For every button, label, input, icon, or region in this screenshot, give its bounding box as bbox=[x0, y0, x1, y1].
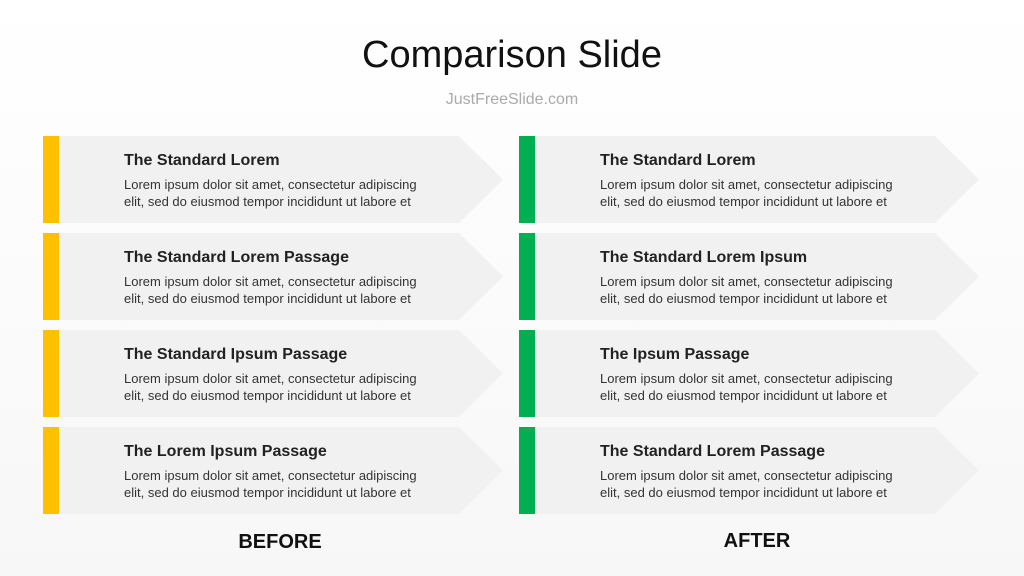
after item 4 bbox=[519, 427, 937, 514]
after item 2: elit, sed do eiusmod tempor incididunt ut labore et bbox=[600, 291, 887, 306]
before item 1: The Standard Lorem bbox=[124, 152, 280, 169]
before item 1: elit, sed do eiusmod tempor incididunt ut labore et bbox=[124, 194, 411, 209]
before item 1 bbox=[43, 136, 502, 223]
subtitle: JustFreeSlide.com bbox=[446, 91, 578, 108]
before item 3: The Standard Ipsum Passage bbox=[124, 346, 347, 363]
before item 3: Lorem ipsum dolor sit amet, consectetur adipiscing bbox=[124, 371, 417, 386]
after item 4: elit, sed do eiusmod tempor incididunt ut labore et bbox=[600, 485, 887, 500]
before item 3 bbox=[43, 330, 502, 417]
after item 2: The Standard Lorem Ipsum bbox=[600, 249, 807, 266]
before item 2: elit, sed do eiusmod tempor incididunt ut labore et bbox=[124, 291, 411, 306]
before item 3: elit, sed do eiusmod tempor incididunt ut labore et bbox=[124, 388, 411, 403]
before item 4 bbox=[43, 427, 461, 514]
label: before: BEFORE bbox=[238, 531, 322, 553]
after item 1: Lorem ipsum dolor sit amet, consectetur adipiscing bbox=[600, 177, 893, 192]
after item 1: elit, sed do eiusmod tempor incididunt ut labore et bbox=[600, 194, 887, 209]
before item 4: Lorem ipsum dolor sit amet, consectetur adipiscing bbox=[124, 468, 417, 483]
after item 3: Lorem ipsum dolor sit amet, consectetur adipiscing bbox=[600, 371, 893, 386]
before item 2: The Standard Lorem Passage bbox=[124, 249, 349, 266]
panel: after column bbox=[519, 136, 978, 514]
before item 4: elit, sed do eiusmod tempor incididunt ut labore et bbox=[124, 485, 411, 500]
panel: before column bbox=[43, 136, 502, 514]
after item 2: Lorem ipsum dolor sit amet, consectetur adipiscing bbox=[600, 274, 893, 289]
label: after: AFTER bbox=[724, 530, 790, 552]
after item 3: elit, sed do eiusmod tempor incididunt ut labore et bbox=[600, 388, 887, 403]
before item 2: Lorem ipsum dolor sit amet, consectetur adipiscing bbox=[124, 274, 417, 289]
before item 1: Lorem ipsum dolor sit amet, consectetur adipiscing bbox=[124, 177, 417, 192]
after item 3: The Ipsum Passage bbox=[600, 346, 749, 363]
after item 3 bbox=[519, 330, 978, 417]
after item 4: Lorem ipsum dolor sit amet, consectetur adipiscing bbox=[600, 468, 893, 483]
after item 1: The Standard Lorem bbox=[600, 152, 756, 169]
before item 2 bbox=[43, 233, 502, 320]
before item 4: The Lorem Ipsum Passage bbox=[124, 443, 327, 460]
after item 2 bbox=[519, 233, 978, 320]
after item 1 bbox=[519, 136, 978, 223]
title: Comparison Slide bbox=[362, 34, 662, 76]
after item 4: The Standard Lorem Passage bbox=[600, 443, 825, 460]
